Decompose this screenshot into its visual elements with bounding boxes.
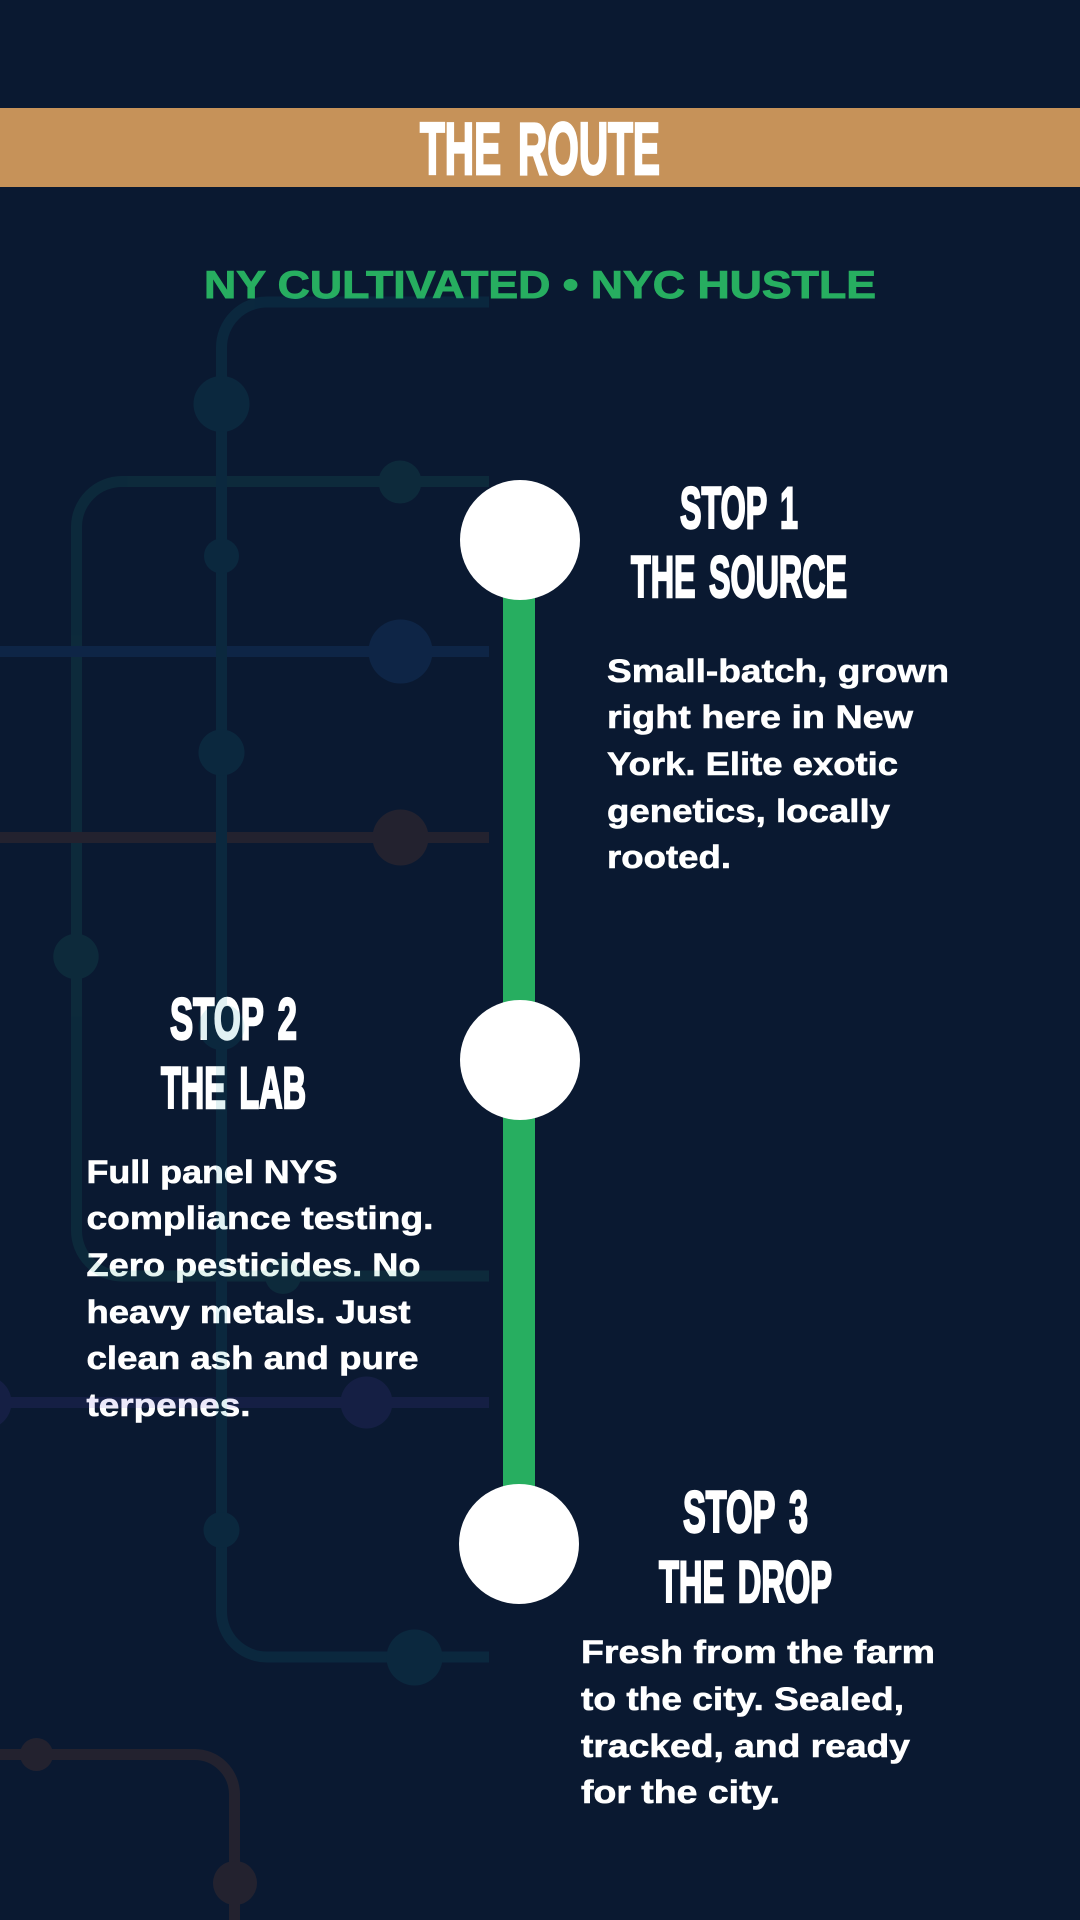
stop 2 heading: STOP 2 bbox=[170, 987, 297, 1052]
stop 2 description: compliance testing. bbox=[86, 1200, 433, 1236]
stop 3 description: for the city. bbox=[581, 1774, 780, 1810]
stop 1 description bbox=[607, 653, 949, 875]
stop 3 description: Fresh from the farm bbox=[581, 1634, 935, 1670]
blue subway line with station bbox=[0, 620, 489, 684]
purple subway line with stations bbox=[0, 1376, 489, 1429]
rust subway line with station bbox=[0, 810, 489, 866]
stop 3 marker bbox=[459, 1484, 579, 1604]
stop 3 heading: STOP 3 bbox=[683, 1480, 808, 1545]
stop 1 marker bbox=[460, 480, 580, 600]
stop 2 description: Full panel NYS bbox=[86, 1154, 338, 1190]
panel: stop 2 bbox=[86, 987, 433, 1423]
stop 2 description: Zero pesticides. No bbox=[86, 1247, 420, 1283]
title banner bbox=[0, 108, 1080, 190]
stop 2 heading: THE LAB bbox=[161, 1056, 306, 1121]
stop 2 description: terpenes. bbox=[86, 1387, 251, 1423]
panel: stop 3 bbox=[581, 1480, 935, 1810]
stop 3 description bbox=[581, 1634, 935, 1810]
stop 1 heading: THE SOURCE bbox=[631, 545, 847, 610]
route line with three stops bbox=[459, 480, 580, 1604]
stop 3 description: tracked, and ready bbox=[581, 1728, 910, 1764]
stop 2 marker bbox=[460, 1000, 580, 1120]
stop 1 description: right here in New bbox=[607, 699, 913, 735]
teal subway line with stations bbox=[194, 302, 489, 1686]
stop 3 heading bbox=[659, 1480, 832, 1615]
stop 2 heading bbox=[161, 987, 306, 1121]
stop 1 description: York. Elite exotic bbox=[607, 746, 898, 782]
stop 1 heading bbox=[631, 476, 847, 610]
stop 2 description: clean ash and pure bbox=[86, 1340, 418, 1376]
stop 1 heading: STOP 1 bbox=[680, 476, 798, 541]
faint subway map overlay bbox=[0, 302, 489, 1920]
subtitle: NY CULTIVATED • NYC HUSTLE bbox=[204, 264, 876, 307]
stop 1 description: genetics, locally bbox=[607, 793, 890, 829]
stop 1 description: Small-batch, grown bbox=[607, 653, 949, 689]
rust corner subway line with stations bbox=[0, 1738, 257, 1920]
stop 1 description: rooted. bbox=[607, 839, 731, 875]
stop 2 description: heavy metals. Just bbox=[86, 1294, 411, 1330]
green-teal subway line with stations bbox=[53, 460, 489, 1294]
title: THE ROUTE bbox=[420, 109, 660, 190]
stop 3 description: to the city. Sealed, bbox=[581, 1681, 904, 1717]
panel: stop 1 bbox=[607, 476, 949, 875]
stop 2 description bbox=[86, 1154, 433, 1423]
stop 3 heading: THE DROP bbox=[659, 1550, 832, 1615]
